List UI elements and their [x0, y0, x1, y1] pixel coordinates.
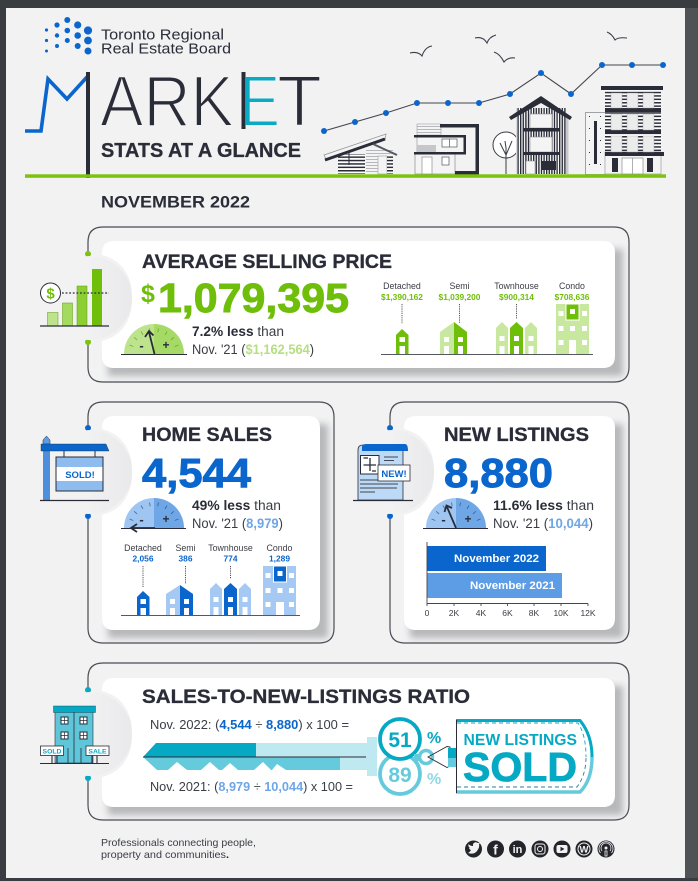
icon: sold sign: SOLD! [65, 470, 95, 481]
key graphic [143, 737, 377, 776]
key ring and string [414, 746, 450, 768]
icon: rising bars with dollar [40, 269, 109, 326]
panel: new listings [350, 402, 629, 643]
formula: November 2021: Nov. 2021: (8,979 ÷ 10,044) x 100 = [150, 779, 353, 794]
gauge: - [139, 338, 144, 353]
subtitle: STATS AT A GLANCE [101, 140, 301, 162]
date heading: NOVEMBER 2022 [101, 192, 250, 212]
icon: building with sold and sale signs: SOLD [43, 748, 62, 756]
housing type breakdown: Condo [559, 281, 585, 291]
bar chart: listings by year: 2K [449, 608, 460, 618]
housing type breakdown: 386 [179, 554, 193, 564]
ratio 2021 circle [380, 754, 441, 794]
ratio 2022 circle: 51 [388, 729, 412, 752]
footer tagline: property and communities . [101, 849, 229, 861]
gauge: + [464, 512, 472, 526]
right margin strip [685, 8, 698, 878]
notch shade [48, 430, 132, 514]
skyline house 2 [414, 124, 479, 174]
heading: HOME SALES [142, 424, 272, 446]
bar chart: listings by year: 4K [476, 608, 487, 618]
tag: new listings sold [448, 720, 592, 793]
housing type breakdown: Detached [383, 281, 421, 291]
skyline house 3 [509, 96, 572, 174]
big price: $ [141, 280, 155, 308]
housing type breakdown: $900,314 [499, 292, 534, 302]
footer tagline [101, 837, 256, 861]
housing type breakdown: Semi [175, 543, 196, 553]
gauge: + [162, 338, 170, 352]
gauge: - [139, 512, 144, 527]
big number: 4,544 [142, 450, 251, 496]
logo: Toronto Regional Real Estate Board [45, 17, 231, 58]
housing type breakdown: 774 [224, 554, 238, 564]
panel outline and connector dots [85, 402, 334, 643]
skyline house 4 [586, 86, 664, 174]
notch shade [350, 430, 434, 514]
comparison text: 7.2% less than [192, 324, 284, 339]
white card [102, 416, 320, 630]
big number: 8,880 [444, 450, 553, 496]
heading: AVERAGE SELLING PRICE [142, 251, 392, 273]
line chart over skyline [321, 62, 666, 134]
bar chart: listings by year: 12K [580, 608, 596, 618]
ratio 2021 circle: % [427, 771, 441, 788]
bar chart: listings by year: 0 [425, 608, 430, 618]
formula: November 2022: Nov. 2022: (4,544 ÷ 8,880) x 100 = [150, 717, 349, 732]
tag: new listings sold: SOLD [463, 744, 577, 790]
title: MARKET: E [240, 62, 280, 142]
panel outline and connector dots [85, 227, 629, 382]
housing type breakdown: $1,390,162 [381, 292, 423, 302]
panel outline and connector dots [387, 402, 629, 643]
housing type breakdown: 2,056 [133, 554, 154, 564]
bar: November 2022 [427, 546, 546, 571]
heading: NEW LISTINGS [444, 424, 589, 446]
comparison text: Nov. '21 (10,044) [493, 516, 593, 531]
housing type breakdown: Townhouse [494, 281, 539, 291]
title: MARKET: ARK [100, 62, 234, 142]
white card [404, 416, 615, 630]
skyline house 1 [324, 134, 397, 174]
bar: November 2022: November 2022 [454, 553, 539, 565]
housing type breakdown: Townhouse [208, 543, 253, 553]
housing type breakdown: Semi [449, 281, 470, 291]
housing type breakdown: 1,289 [269, 554, 290, 564]
birds [410, 32, 627, 62]
bar: November 2021 [427, 573, 562, 598]
bar chart: listings by year: 6K [502, 608, 513, 618]
white card [102, 241, 615, 368]
ratio 2022 circle [380, 719, 441, 759]
icon: new listing sheet: NEW! [381, 469, 407, 480]
notch shade [48, 692, 132, 776]
ground line [25, 174, 666, 178]
bar: November 2021: November 2021 [470, 580, 555, 592]
title: MARKET: T [277, 62, 322, 142]
footer tagline: Professionals connecting people, [101, 837, 256, 849]
gauge [423, 498, 488, 528]
comparison text [192, 324, 314, 357]
gauge [121, 324, 187, 354]
logo: Toronto Regional Real Estate Board: Real Estate Board [101, 40, 231, 58]
icon: building with sold and sale signs: SALE [88, 748, 107, 756]
comparison text: 11.6% less than [493, 498, 594, 513]
notch shade [48, 256, 132, 340]
bar chart: listings by year: 8K [529, 608, 540, 618]
gauge [121, 498, 186, 532]
icon: rising bars with dollar: $ [46, 286, 55, 302]
comparison text [192, 498, 283, 531]
gauge: + [162, 512, 170, 526]
comparison text: 49% less than [192, 498, 281, 513]
housing type breakdown: Condo [267, 543, 293, 553]
housing type breakdown: $1,039,200 [439, 292, 481, 302]
heading: SALES-TO-NEW-LISTINGS RATIO [142, 686, 470, 708]
panel: average selling price [40, 227, 629, 382]
logo: Toronto Regional Real Estate Board: Toronto Regional [101, 26, 224, 44]
bar chart: listings by year [425, 542, 596, 618]
gauge: - [441, 512, 446, 527]
comparison text [493, 498, 594, 531]
icon: sold sign [40, 436, 109, 500]
white card [102, 678, 615, 807]
panel outline and connector dots [85, 663, 629, 820]
skyline tree [493, 132, 519, 174]
icon: building with sold and sale signs [40, 706, 109, 764]
housing type breakdown: $708,636 [555, 292, 590, 302]
social media icons: in [513, 844, 523, 856]
icon: new listing sheet [353, 444, 413, 500]
ratio 2022 circle: % [427, 730, 441, 747]
housing type breakdown [121, 543, 300, 616]
title: MARKET [25, 62, 322, 178]
panel: home sales [40, 402, 334, 643]
big price: 1,079,395 [158, 275, 349, 321]
panel: sales-to-new-listings ratio [40, 663, 629, 820]
housing type breakdown: Detached [124, 543, 162, 553]
comparison text: Nov. '21 (8,979) [192, 516, 283, 531]
bar chart: listings by year: 10K [553, 608, 569, 618]
social media icons: f [493, 842, 498, 858]
housing type breakdown [381, 281, 593, 354]
comparison text: Nov. '21 ($1,162,564) [192, 342, 314, 357]
tag: new listings sold: NEW LISTINGS [464, 732, 577, 749]
ratio 2021 circle: 89 [388, 764, 412, 787]
social media icons [465, 840, 614, 858]
social media icons: W [580, 844, 589, 856]
